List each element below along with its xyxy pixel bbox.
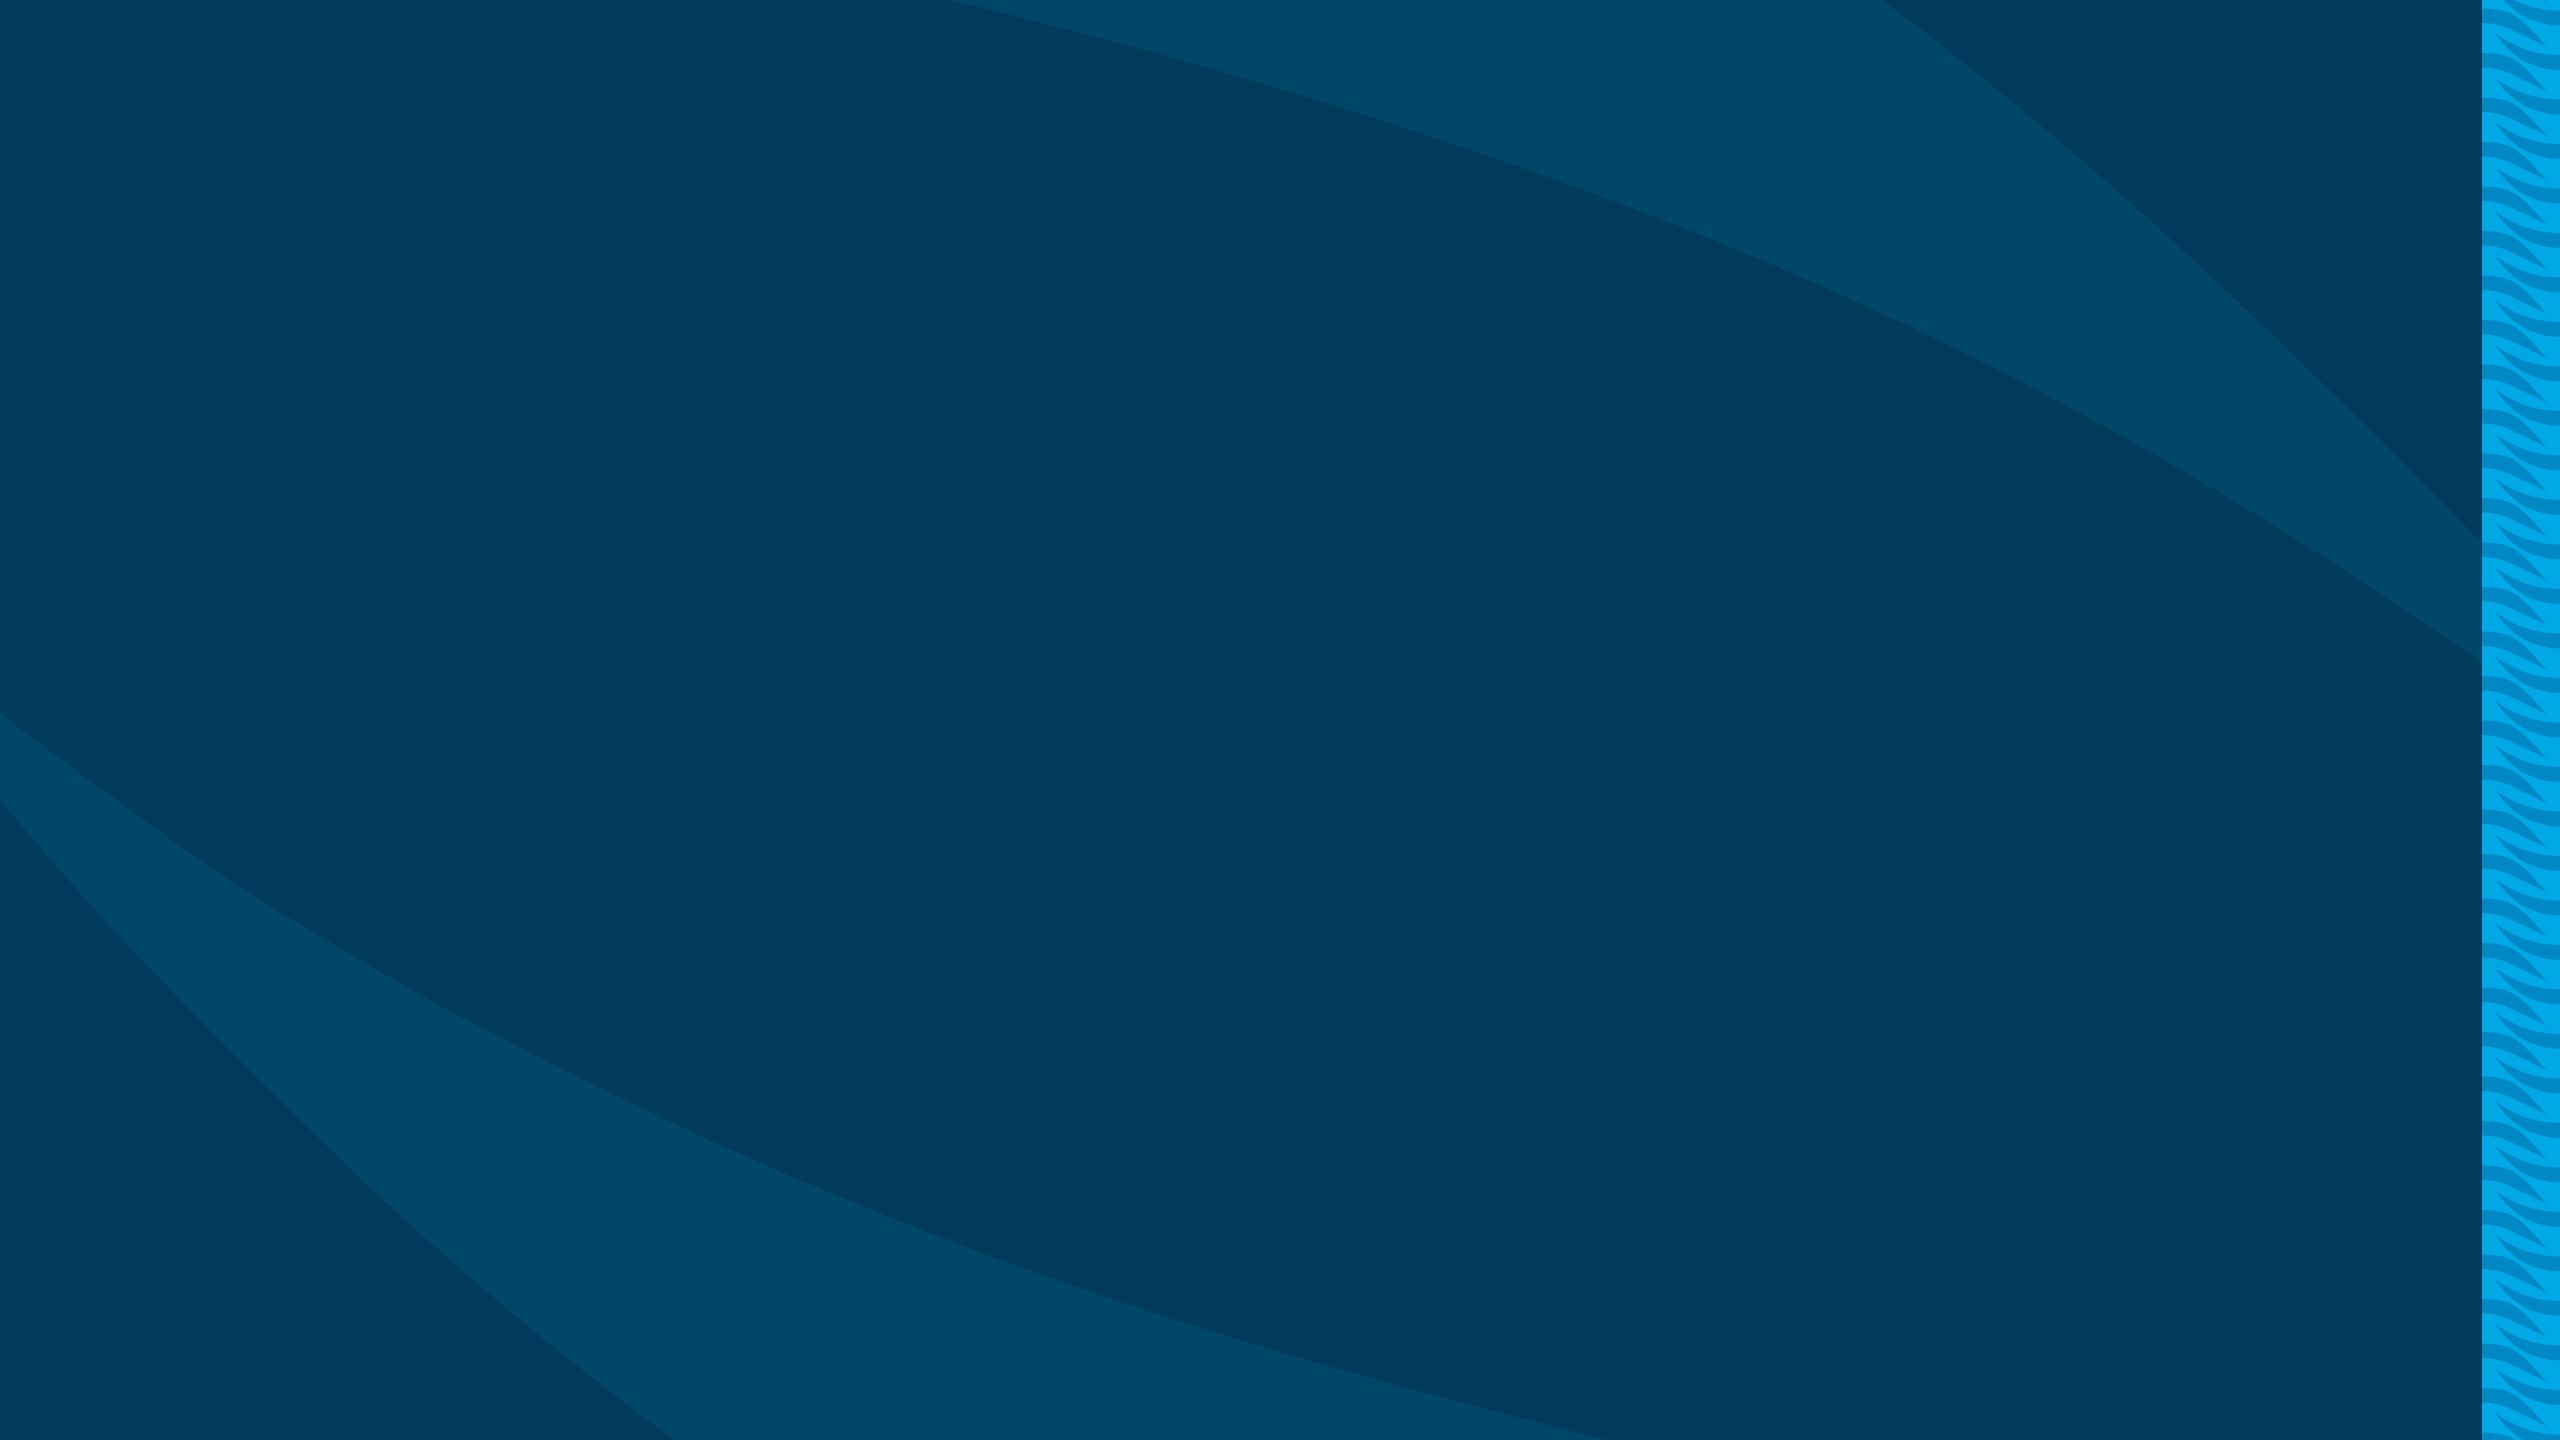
top right curved band bbox=[950, 0, 2482, 663]
bottom left curved band bbox=[0, 713, 1608, 1440]
right side patterned strip bbox=[2482, 0, 2560, 1440]
